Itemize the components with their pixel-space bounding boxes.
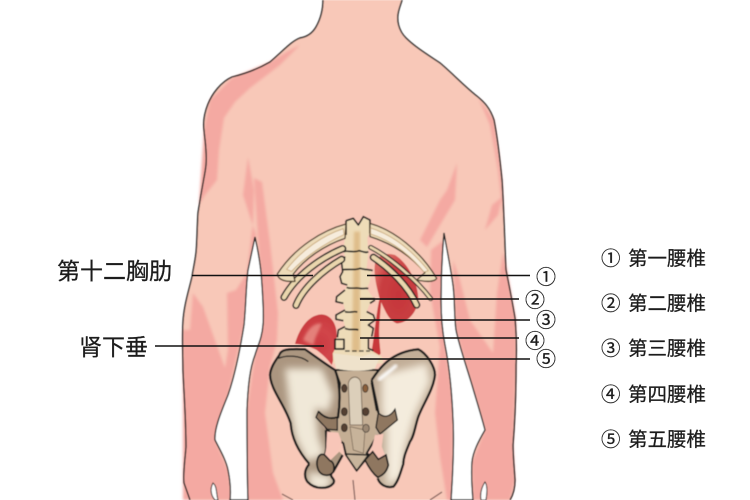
legend: lumbar vertebrae: 第五腰椎 bbox=[628, 429, 706, 451]
right kidney bbox=[375, 254, 418, 323]
callout numbers on figure: ② bbox=[525, 289, 545, 312]
ureter bbox=[371, 295, 381, 356]
twelfth ribs bbox=[277, 223, 437, 305]
body figure bbox=[183, 0, 516, 500]
buttock lines bbox=[282, 480, 442, 500]
legend: lumbar vertebrae: ① bbox=[601, 248, 621, 270]
legend: lumbar vertebrae: ② bbox=[601, 293, 621, 315]
callout numbers on figure bbox=[525, 266, 556, 371]
sacrum bbox=[318, 370, 397, 471]
callout numbers on figure: ③ bbox=[536, 309, 556, 332]
legend: lumbar vertebrae: ④ bbox=[601, 384, 621, 406]
legend: lumbar vertebrae: 第四腰椎 bbox=[628, 384, 706, 406]
leader lines: lumbar vertebrae bbox=[360, 276, 530, 359]
legend: lumbar vertebrae: 第三腰椎 bbox=[628, 338, 706, 360]
callout numbers on figure: ④ bbox=[525, 330, 545, 353]
sacrum tip bbox=[345, 454, 368, 471]
lumbar vertebrae bbox=[333, 217, 383, 363]
pelvis bbox=[270, 349, 435, 490]
leader line: twelfth rib bbox=[192, 274, 313, 276]
fifth lumbar base bbox=[333, 353, 380, 371]
kidneys, spine and ribs bbox=[277, 217, 437, 365]
white gaps between arms and torso bbox=[215, 237, 263, 500]
body outline bbox=[183, 0, 516, 500]
foramina bbox=[341, 384, 369, 432]
shading on arms and torso bbox=[183, 45, 516, 500]
legend: lumbar vertebrae: ③ bbox=[601, 338, 621, 360]
callout numbers on figure: ① bbox=[536, 266, 556, 289]
skin silhouette bbox=[183, 0, 516, 500]
left hip bone bbox=[270, 349, 343, 490]
lowered left kidney bbox=[295, 314, 337, 365]
callout numbers on figure: ⑤ bbox=[536, 348, 556, 371]
leader line: kidney ptosis bbox=[155, 345, 324, 347]
legend: lumbar vertebrae: 第二腰椎 bbox=[628, 293, 706, 315]
legend: lumbar vertebrae: ⑤ bbox=[601, 429, 621, 451]
label: twelfth rib: 第十二胸肋 bbox=[57, 258, 172, 284]
legend: lumbar vertebrae: 第一腰椎 bbox=[628, 248, 706, 270]
thumb slits bbox=[211, 483, 218, 500]
right hip bone bbox=[365, 349, 435, 487]
legend: lumbar vertebrae bbox=[601, 248, 706, 451]
label: kidney ptosis: 肾下垂 bbox=[79, 334, 148, 360]
